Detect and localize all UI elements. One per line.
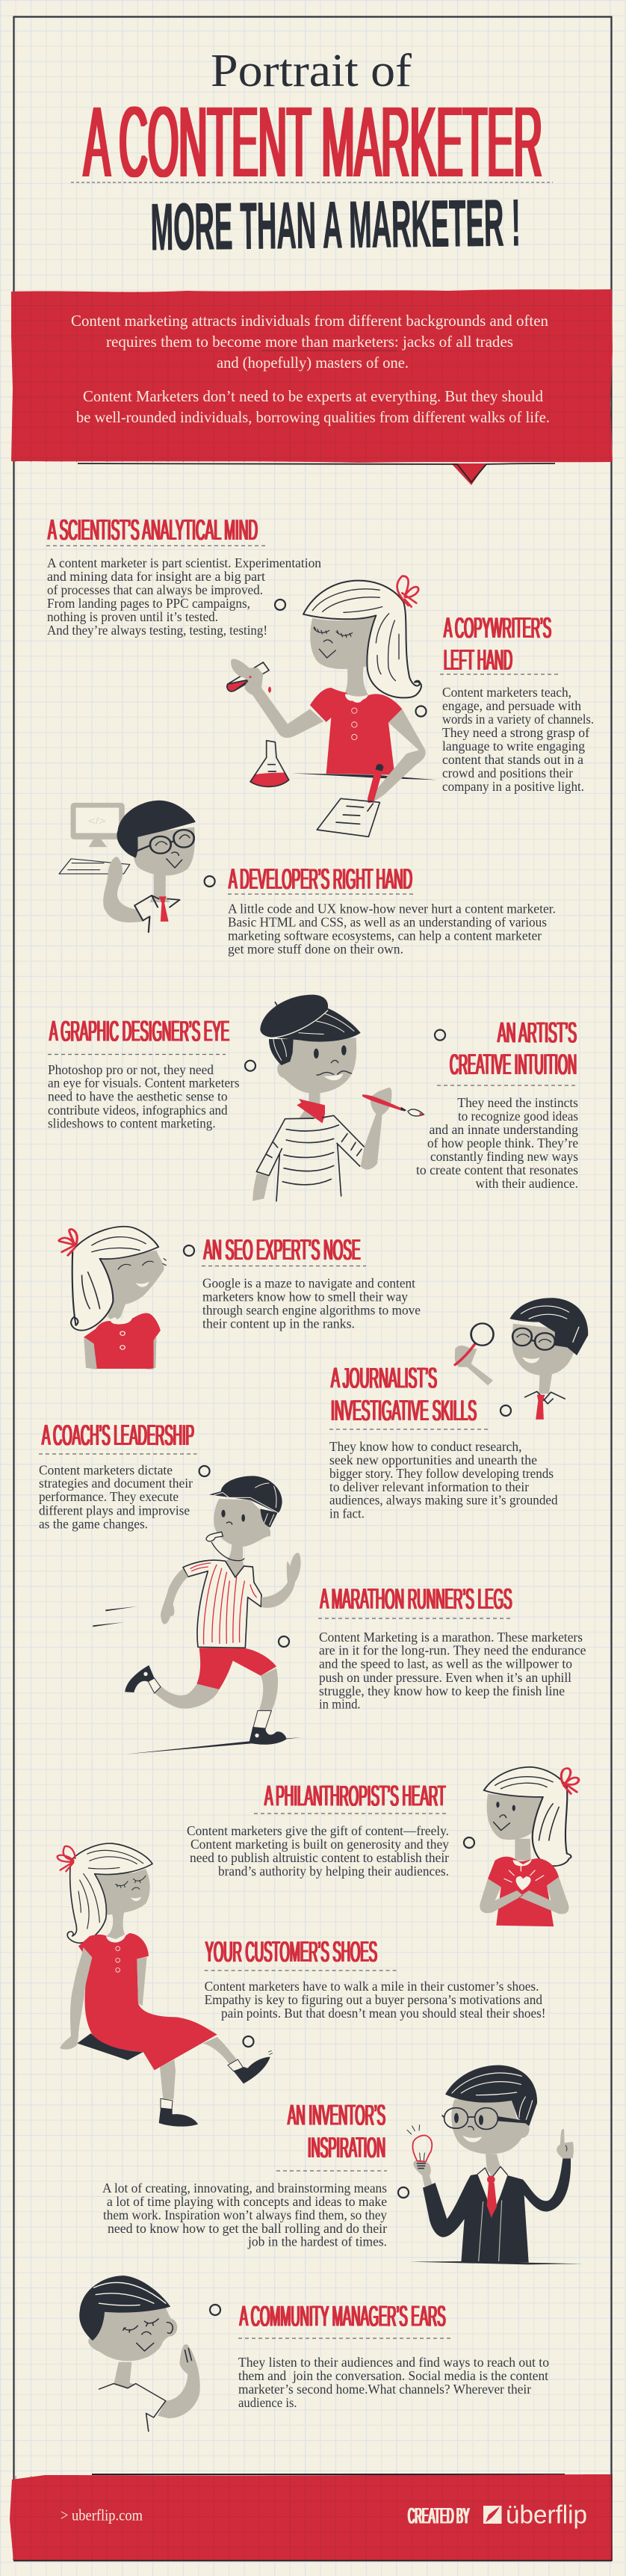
panel: SEO expert's nose <box>184 1234 421 1331</box>
panel: footer banner: CREATED BY <box>408 2504 469 2528</box>
heading <box>444 612 551 677</box>
body text: engage, and persuade with <box>442 698 581 713</box>
bubble <box>184 1245 194 1256</box>
heading <box>450 1017 577 1081</box>
body text: strategies and document their <box>39 1476 193 1491</box>
body text: content that stands out in a <box>442 752 583 767</box>
icon: artist illustration <box>252 995 424 1201</box>
body text: of processes that can always be improved. <box>47 582 263 597</box>
body text: an eye for visuals. Content marketers <box>48 1076 240 1091</box>
body text <box>319 1630 586 1712</box>
body text: Google is a maze to navigate and content <box>202 1276 415 1291</box>
body text: to create content that resonates <box>416 1162 578 1177</box>
body text: through search engine algorithms to move <box>202 1303 421 1318</box>
body text: marketer’s second home.What channels? Wherever their <box>238 2382 531 2397</box>
body text: and mining data for insight are a big part <box>47 569 265 584</box>
panel: marathon runner's legs <box>279 1583 586 1712</box>
body text: They listen to their audiences and find ways to reach out to <box>238 2355 549 2370</box>
panel: your customer's shoes <box>205 1936 545 2047</box>
body text <box>238 2355 549 2410</box>
bubble <box>279 1636 289 1647</box>
icon: inventor illustration <box>407 2065 583 2264</box>
bubble <box>199 1466 210 1476</box>
intro text: requires them to become more than marketers: jacks of all trades <box>106 333 513 351</box>
body text: with their audience. <box>475 1176 578 1191</box>
panel: community manager's ears <box>210 2301 549 2410</box>
body text: their content up in the ranks. <box>202 1316 355 1331</box>
body text: nothing is proven until it’s tested. <box>47 609 218 624</box>
text: A COACH’S LEADERSHIP <box>42 1420 194 1452</box>
body text: performance. They execute <box>39 1489 179 1504</box>
body text: marketing software ecosystems, can help a content marketer <box>228 928 542 943</box>
icon: developer illustration <box>59 801 196 932</box>
link text: > uberflip.com <box>61 2506 143 2524</box>
body text: A content marketer is part scientist. Experimentation <box>47 555 321 570</box>
intro text: Content marketing attracts individuals from different backgrounds and often <box>71 312 548 330</box>
body text: to recognize good ideas <box>458 1109 578 1124</box>
bubble <box>435 1030 445 1041</box>
body text <box>48 1062 240 1131</box>
body text: They need the instincts <box>457 1095 578 1110</box>
icon: journalist illustration <box>455 1298 588 1420</box>
icon: girl smelling illustration <box>59 1227 166 1369</box>
body text: as the game changes. <box>39 1517 148 1532</box>
body text: pain points. But that doesn’t mean you should steal their shoes! <box>221 2006 545 2021</box>
body text <box>416 1095 578 1191</box>
body text: A little code and UX know-how never hurt a content marketer. <box>228 902 556 916</box>
body text: to deliver relevant information to their <box>329 1479 529 1494</box>
body text: them and join the conversation. Social media is the content <box>238 2368 548 2383</box>
intro text: Content Marketers don’t need to be experts at everything. But they should <box>83 387 543 405</box>
bubble <box>205 876 215 887</box>
body text: crowd and positions their <box>442 765 573 780</box>
body text: of how people think. They’re <box>427 1136 578 1150</box>
body text: Content marketers have to walk a mile in their customer’s shoes. <box>205 1979 539 1994</box>
body text: A lot of creating, innovating, and brainstorming means <box>102 2181 387 2196</box>
body text: in fact. <box>329 1506 365 1521</box>
body text: marketers know how to smell their way <box>202 1289 408 1304</box>
body text: seek new opportunities and unearth the <box>329 1452 537 1467</box>
body text: Content marketers give the gift of content—freely. <box>187 1823 449 1838</box>
body text: a lot of time playing with concepts and ideas to make <box>107 2194 387 2209</box>
body text <box>329 1439 558 1521</box>
body text: need to have the aesthetic sense to <box>48 1089 228 1104</box>
bubble <box>501 1405 511 1416</box>
body text <box>202 1276 421 1331</box>
body text: Basic HTML and CSS, as well as an understanding of various <box>228 914 547 929</box>
body text: words in a variety of channels. <box>442 712 594 727</box>
body text: and an innate understanding <box>429 1122 578 1137</box>
icon: uberflip logo mark <box>483 2506 502 2524</box>
bubble <box>244 2036 254 2047</box>
panel: graphic designer's eye <box>48 1016 255 1131</box>
panel: journalist's investigative skills <box>329 1362 558 1521</box>
heading: A JOURNALIST’S <box>331 1362 437 1395</box>
title block <box>71 46 553 264</box>
body text: contribute videos, infographics and <box>48 1103 228 1118</box>
body text: audience is. <box>238 2395 297 2410</box>
body text: struggle, they know how to keep the finish line <box>319 1683 565 1698</box>
body text: constantly finding new ways <box>430 1149 578 1164</box>
body text: and the speed to last, as well as the willpower to <box>319 1657 572 1671</box>
panel: your customer's shoes: YOUR CUSTOMER’S SHOES <box>205 1936 377 1968</box>
panel: scientist's analytical mind <box>46 514 321 638</box>
body text: Content marketing is built on generosity and they <box>190 1837 449 1852</box>
body text: slideshows to content marketing. <box>48 1116 216 1131</box>
body text: them work. Inspiration won’t always find them, so they <box>103 2207 387 2222</box>
icon: woman scientist and copywriter illustration <box>227 576 437 836</box>
bubble <box>415 706 426 716</box>
body text: Photoshop pro or not, they need <box>48 1062 214 1077</box>
panel: intro banner <box>11 289 613 485</box>
icon: sitting girl illustration <box>58 1843 273 2127</box>
body text: And they’re always testing, testing, testing! <box>47 623 267 638</box>
bubble <box>210 2305 220 2315</box>
body text: They know how to conduct research, <box>329 1439 521 1454</box>
body text: bigger story. They follow developing trends <box>329 1466 554 1481</box>
icon: girl with heart illustration <box>480 1767 579 1926</box>
heading <box>288 2100 385 2164</box>
panel: artist's creative intuition <box>416 1017 578 1191</box>
panel: inventor's inspiration: INSPIRATION <box>308 2132 385 2164</box>
icon: code glyph: </> <box>88 816 105 827</box>
panel: philanthropist's heart <box>187 1781 474 1879</box>
body text <box>39 1463 193 1532</box>
body text: in mind. <box>319 1697 361 1712</box>
body text: company in a positive light. <box>442 779 584 794</box>
body text: are in it for the long-run. They need the endurance <box>319 1643 586 1658</box>
body text: different plays and improvise <box>39 1503 190 1518</box>
body text <box>228 902 556 957</box>
panel: SEO expert's nose: AN SEO EXPERT’S NOSE <box>203 1234 360 1266</box>
body text: job in the hardest of times. <box>247 2234 387 2249</box>
title: Portrait of: Portrait of <box>211 46 412 96</box>
panel: graphic designer's eye: A GRAPHIC DESIGNER’S EYE <box>49 1016 229 1048</box>
body text: need to know how to get the ball rolling and do their <box>108 2221 387 2236</box>
intro text <box>71 312 550 426</box>
panel: inventor's inspiration <box>102 2100 409 2249</box>
body text: need to publish altruistic content to establish their <box>190 1850 449 1865</box>
body text <box>102 2181 387 2249</box>
panel: inventor's inspiration: AN INVENTOR’S <box>288 2100 385 2132</box>
panel: scientist's analytical mind: A SCIENTIST’S ANALYTICAL MIND <box>48 514 258 546</box>
icon: community manager illustration <box>79 2275 200 2431</box>
heading: LEFT HAND <box>444 644 512 677</box>
logo wordmark: überflip <box>506 2501 587 2530</box>
body text: brand’s authority by helping their audiences. <box>218 1864 449 1879</box>
body text: Content Marketing is a marathon. These marketers <box>319 1630 583 1645</box>
bubble <box>275 600 285 610</box>
intro text: and (hopefully) masters of one. <box>217 354 409 372</box>
body text <box>187 1823 449 1879</box>
body text: Content marketers dictate <box>39 1463 173 1478</box>
body text: They need a strong grasp of <box>442 725 589 740</box>
panel: coach's leadership <box>39 1420 210 1532</box>
bubble <box>464 1837 474 1848</box>
body text: From landing pages to PPC campaigns, <box>47 596 250 611</box>
body text <box>205 1979 545 2021</box>
body text <box>442 685 594 794</box>
bubble <box>245 1061 255 1071</box>
body text: push on under pressure. Even when it’s an uphill <box>319 1670 571 1685</box>
body text: audiences, always making sure it’s grounded <box>329 1493 558 1508</box>
panel: copywriter's left hand <box>415 612 594 794</box>
panel: developer's right hand <box>205 863 556 957</box>
body text: language to write engaging <box>442 739 585 754</box>
bubble <box>398 2187 409 2198</box>
heading <box>331 1362 477 1427</box>
body text <box>47 555 321 638</box>
body text: Content marketers teach, <box>442 685 571 700</box>
panel: footer banner <box>10 2474 613 2561</box>
intro text: be well-rounded individuals, borrowing qualities from different walks of life. <box>76 408 550 426</box>
icon: coach running illustration <box>93 1476 301 1754</box>
body text: get more stuff done on their own. <box>228 942 403 957</box>
body text: Empathy is key to figuring out a buyer persona’s motivations and <box>205 1992 542 2007</box>
